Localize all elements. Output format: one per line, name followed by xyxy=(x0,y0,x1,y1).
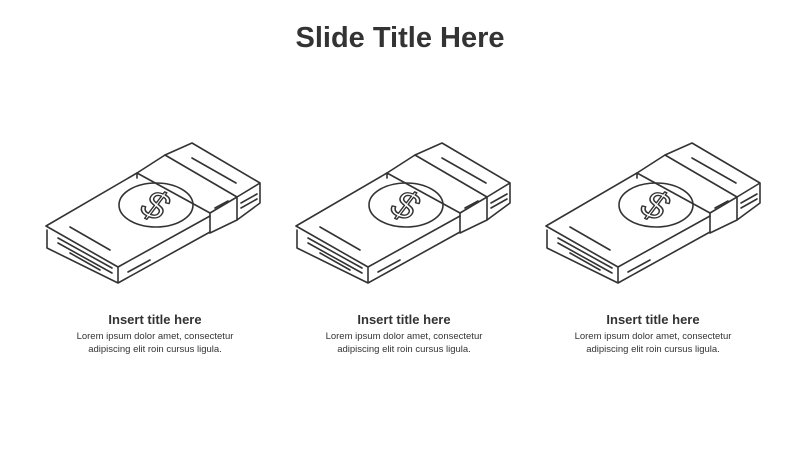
icon: money stack 1 xyxy=(46,143,260,283)
item 2 text xyxy=(326,312,482,355)
title: Slide Title Here xyxy=(296,22,504,54)
item 2 text: adipiscing elit roin cursus ligula. xyxy=(337,344,471,355)
item 1 text: Insert title here xyxy=(108,312,202,327)
item 1 text: adipiscing elit roin cursus ligula. xyxy=(88,344,222,355)
icon: money stack 3 xyxy=(546,143,760,283)
item 2 text: Insert title here xyxy=(357,312,451,327)
item 3 text: Lorem ipsum dolor amet, consectetur xyxy=(575,331,731,342)
icon: money stack 2 xyxy=(296,143,510,283)
item 2 text: Lorem ipsum dolor amet, consectetur xyxy=(326,331,482,342)
item 1 text: Lorem ipsum dolor amet, consectetur xyxy=(77,331,233,342)
item 3 text: Insert title here xyxy=(606,312,700,327)
item 3 text: adipiscing elit roin cursus ligula. xyxy=(586,344,720,355)
icon: money stack 3: $ xyxy=(632,182,680,228)
icon: money stack 2: $ xyxy=(382,182,430,228)
icon: money stack 1: $ xyxy=(132,182,180,228)
item 3 text xyxy=(575,312,732,355)
item 1 text xyxy=(77,312,234,355)
